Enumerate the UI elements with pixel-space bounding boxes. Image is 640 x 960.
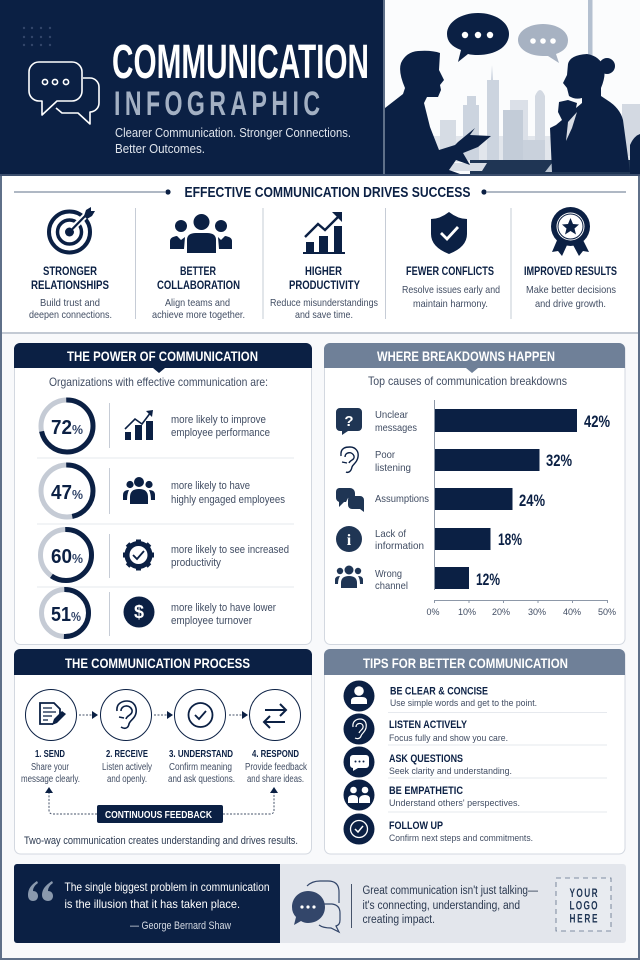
icon: check circle <box>188 703 212 727</box>
tip: listen actively: LISTEN ACTIVELY <box>389 719 468 731</box>
stat row: 47%: more likely to have <box>171 480 250 492</box>
donut: 60%: % <box>72 551 83 566</box>
icon: dollar: $ <box>134 602 144 622</box>
tip: be clear and concise: Use simple words and get to the point. <box>390 698 537 709</box>
closing statement <box>362 885 538 926</box>
arrow: understand to respond <box>229 711 248 719</box>
donut: 60% <box>40 530 92 580</box>
closing statement: it's connecting, understanding, and <box>362 900 520 912</box>
x axis: 10% <box>458 607 476 617</box>
icon: document with pen <box>40 703 66 725</box>
subtitle word: INFOGRAPHIC <box>114 86 320 123</box>
man silhouette <box>385 51 491 174</box>
bar chart: 42% <box>584 412 610 431</box>
arrow: feedback loop left <box>45 787 97 814</box>
illustration: two people talking before a skyline <box>385 0 640 174</box>
icon: people <box>123 477 155 504</box>
bar chart: 32% <box>546 451 572 470</box>
donut: 72%: % <box>72 422 83 437</box>
tagline: Better Outcomes. <box>115 141 205 156</box>
cause: poor listening: Poor <box>375 449 395 461</box>
tip: be empathetic <box>344 780 520 810</box>
step: receive: Listen actively <box>102 762 152 773</box>
icon: medal <box>551 207 590 256</box>
stat row: 72%: employee performance <box>171 427 270 439</box>
caption: Two-way communication creates understanding and drives results. <box>24 835 298 847</box>
tip: ask questions: Seek clarity and understanding. <box>389 766 512 777</box>
tip: ask questions: ASK QUESTIONS <box>389 753 463 765</box>
cause: assumptions <box>336 488 429 512</box>
arrow: receive to understand <box>154 711 173 719</box>
benefit: better collaboration: COLLABORATION <box>157 280 240 292</box>
step: receive: and openly. <box>107 774 147 785</box>
benefit: better collaboration: achieve more together. <box>152 309 245 321</box>
stat row: 72%: more likely to improve <box>171 414 266 426</box>
x axis: 50% <box>598 607 616 617</box>
icon: two bubbles <box>336 488 364 512</box>
donut: 60%: 60 <box>51 546 72 568</box>
logo placeholder: YOUR <box>570 888 598 900</box>
donut: 51% <box>42 590 88 636</box>
tip: follow up: Confirm next steps and commitments. <box>389 833 533 844</box>
skyline <box>432 65 640 162</box>
step: send: 1. SEND <box>35 748 65 760</box>
header banner <box>0 0 383 174</box>
benefit: stronger relationships: deepen connections. <box>29 309 112 321</box>
icon: team <box>170 214 232 253</box>
stat row: 51% <box>42 590 276 636</box>
benefit: higher productivity <box>270 212 378 321</box>
tip: follow up: FOLLOW UP <box>389 820 443 832</box>
arrow: send to receive <box>79 711 98 719</box>
logo placeholder <box>556 878 611 931</box>
step: send: Share your <box>31 762 70 773</box>
cause: wrong channel: Wrong <box>375 568 402 580</box>
donut: 51%: % <box>71 609 81 624</box>
benefit: fewer conflicts: Resolve issues early and <box>402 284 500 296</box>
benefit: improved results <box>524 207 617 310</box>
donut: 72% <box>41 400 93 452</box>
speech bubble light <box>518 24 568 63</box>
step: understand: and ask questions. <box>168 774 235 785</box>
icon: dollar <box>124 596 154 628</box>
step: respond: and share ideas. <box>247 774 304 785</box>
intro text: Organizations with effective communication are: <box>49 375 268 389</box>
benefit: better collaboration <box>152 214 245 321</box>
benefit: fewer conflicts: FEWER CONFLICTS <box>406 266 494 278</box>
x axis <box>426 600 616 617</box>
benefit: fewer conflicts: maintain harmony. <box>413 298 488 310</box>
icon: check circle <box>344 814 374 844</box>
heading: THE COMMUNICATION PROCESS <box>65 655 250 671</box>
icon: people <box>335 566 363 588</box>
tip: follow up <box>344 814 533 844</box>
intro text: Top causes of communication breakdowns <box>368 374 567 388</box>
quote text: The single biggest problem in communication <box>64 880 270 894</box>
icon: speech bubble <box>344 746 374 778</box>
icon: ear <box>341 447 358 472</box>
stat row: 60% <box>40 530 289 580</box>
cause: wrong channel: channel <box>375 580 408 592</box>
donut: 47% <box>41 465 93 517</box>
continuous feedback pill: CONTINUOUS FEEDBACK <box>105 809 212 821</box>
benefit: stronger relationships: Build trust and <box>40 297 100 309</box>
benefit: higher productivity: Reduce misunderstandings <box>270 297 378 309</box>
tip: be clear and concise: BE CLEAR & CONCISE <box>390 686 488 698</box>
panel: tips for better communication <box>324 649 625 854</box>
quote panel <box>14 864 280 943</box>
donut: 47%: % <box>72 487 83 502</box>
bar chart: 12% <box>476 570 500 589</box>
icon: quotation marks <box>28 881 53 901</box>
tip: listen actively <box>344 714 508 744</box>
tagline: Clearer Communication. Stronger Connections. <box>115 125 351 140</box>
icon: gear check <box>123 540 154 570</box>
benefit: stronger relationships <box>29 207 112 321</box>
tagline <box>115 125 351 156</box>
quote text: — George Bernard Shaw <box>130 920 231 932</box>
donut: 47%: 47 <box>51 482 72 504</box>
heading: WHERE BREAKDOWNS HAPPEN <box>377 348 555 364</box>
step: send: message clearly. <box>21 774 80 785</box>
bar chart: 24% <box>519 491 545 510</box>
stat row: 47% <box>41 465 285 517</box>
icon: chat bubbles outline <box>29 62 99 124</box>
heading <box>324 343 625 373</box>
tip: listen actively: Focus fully and show you care. <box>389 733 508 744</box>
cause: unclear messages <box>336 408 417 435</box>
benefit: stronger relationships: RELATIONSHIPS <box>31 280 109 292</box>
step: understand <box>168 690 235 785</box>
stat row: 51%: employee turnover <box>171 615 252 627</box>
donut: 72%: 72 <box>51 417 72 439</box>
icon: question bubble: ? <box>344 413 354 430</box>
cause: assumptions: Assumptions <box>375 493 429 505</box>
closing statement: Great communication isn't just talking— <box>362 885 538 897</box>
heading <box>14 184 626 201</box>
icon: rising chart <box>303 212 345 254</box>
tip: ask questions <box>344 746 512 778</box>
x axis: 40% <box>563 607 581 617</box>
tip: be empathetic: BE EMPATHETIC <box>389 785 463 797</box>
panel: the communication process <box>14 649 312 854</box>
heading: TIPS FOR BETTER COMMUNICATION <box>363 655 568 671</box>
tip: be clear and concise <box>344 680 537 712</box>
icon: person <box>344 680 374 712</box>
benefit: stronger relationships: STRONGER <box>43 266 98 278</box>
stat row: 60%: productivity <box>171 557 221 569</box>
icon: ear <box>117 701 136 728</box>
cause: lack of information: Lack of <box>375 528 406 540</box>
heading <box>14 649 312 675</box>
quote text <box>64 880 270 932</box>
panel: effective communication drives success <box>14 184 626 321</box>
panel: where breakdowns happen <box>324 343 625 644</box>
step: receive <box>100 690 152 785</box>
cause: unclear messages: Unclear <box>375 409 408 421</box>
cause: poor listening <box>341 447 411 474</box>
stat row: 60%: more likely to see increased <box>171 544 289 556</box>
step: respond: Provide feedback <box>245 762 308 773</box>
icon: shield check <box>431 212 467 254</box>
cause: lack of information <box>336 526 424 552</box>
icon: target <box>49 207 95 252</box>
benefit: better collaboration: Align teams and <box>165 297 230 309</box>
step: understand: Confirm meaning <box>169 762 232 773</box>
closing statement: creating impact. <box>362 914 435 926</box>
x axis: 20% <box>492 607 510 617</box>
x axis: 0% <box>426 607 440 617</box>
panel: the power of communication <box>14 343 312 644</box>
tip: be empathetic: Understand others' perspectives. <box>389 798 520 809</box>
icon: swap arrows <box>264 704 286 728</box>
heading <box>324 649 625 675</box>
continuous feedback pill <box>97 805 223 823</box>
cause: lack of information: information <box>375 540 424 552</box>
step: respond <box>245 690 308 785</box>
benefit: improved results: IMPROVED RESULTS <box>524 266 617 278</box>
cause: wrong channel <box>335 566 408 592</box>
icon: ear <box>344 714 374 744</box>
footer band <box>14 864 626 943</box>
quote text: is the illusion that it has taken place. <box>64 897 240 911</box>
title: COMMUNICATION <box>112 36 369 89</box>
heading: EFFECTIVE COMMUNICATION DRIVES SUCCESS <box>184 184 470 201</box>
heading: THE POWER OF COMMUNICATION <box>67 348 258 364</box>
bar chart: 18% <box>498 530 522 549</box>
arrow: feedback loop right <box>223 787 278 814</box>
cause: unclear messages: messages <box>375 422 417 434</box>
x axis: 30% <box>528 607 546 617</box>
step: understand: 3. UNDERSTAND <box>169 748 233 760</box>
cause: poor listening: listening <box>375 462 411 474</box>
decorative dots grid <box>23 27 51 46</box>
icon: info circle: i <box>347 532 352 549</box>
stat row: 47%: highly engaged employees <box>171 494 285 506</box>
stat row: 72% <box>41 400 270 452</box>
woman silhouette <box>550 54 640 174</box>
benefit: improved results: Make better decisions <box>526 284 616 296</box>
benefit: fewer conflicts <box>402 212 500 310</box>
logo placeholder: LOGO <box>570 900 598 913</box>
icon: conversation bubbles <box>292 881 340 932</box>
bar chart <box>426 400 616 617</box>
donut: 51%: 51 <box>51 604 71 626</box>
step: send <box>21 690 80 785</box>
logo placeholder: HERE <box>570 913 598 926</box>
benefit: higher productivity: PRODUCTIVITY <box>289 280 360 292</box>
step: respond: 4. RESPOND <box>252 748 299 760</box>
stat row: 51%: more likely to have lower <box>171 602 276 614</box>
step: receive: 2. RECEIVE <box>106 748 148 760</box>
speech bubble dark <box>447 13 509 62</box>
benefit: higher productivity: and save time. <box>295 309 353 321</box>
benefit: higher productivity: HIGHER <box>305 266 343 278</box>
benefit: improved results: and drive growth. <box>535 298 606 310</box>
icon: chart <box>125 410 153 440</box>
icon: two people <box>344 780 374 810</box>
benefit: better collaboration: BETTER <box>180 266 217 278</box>
heading <box>14 343 312 373</box>
